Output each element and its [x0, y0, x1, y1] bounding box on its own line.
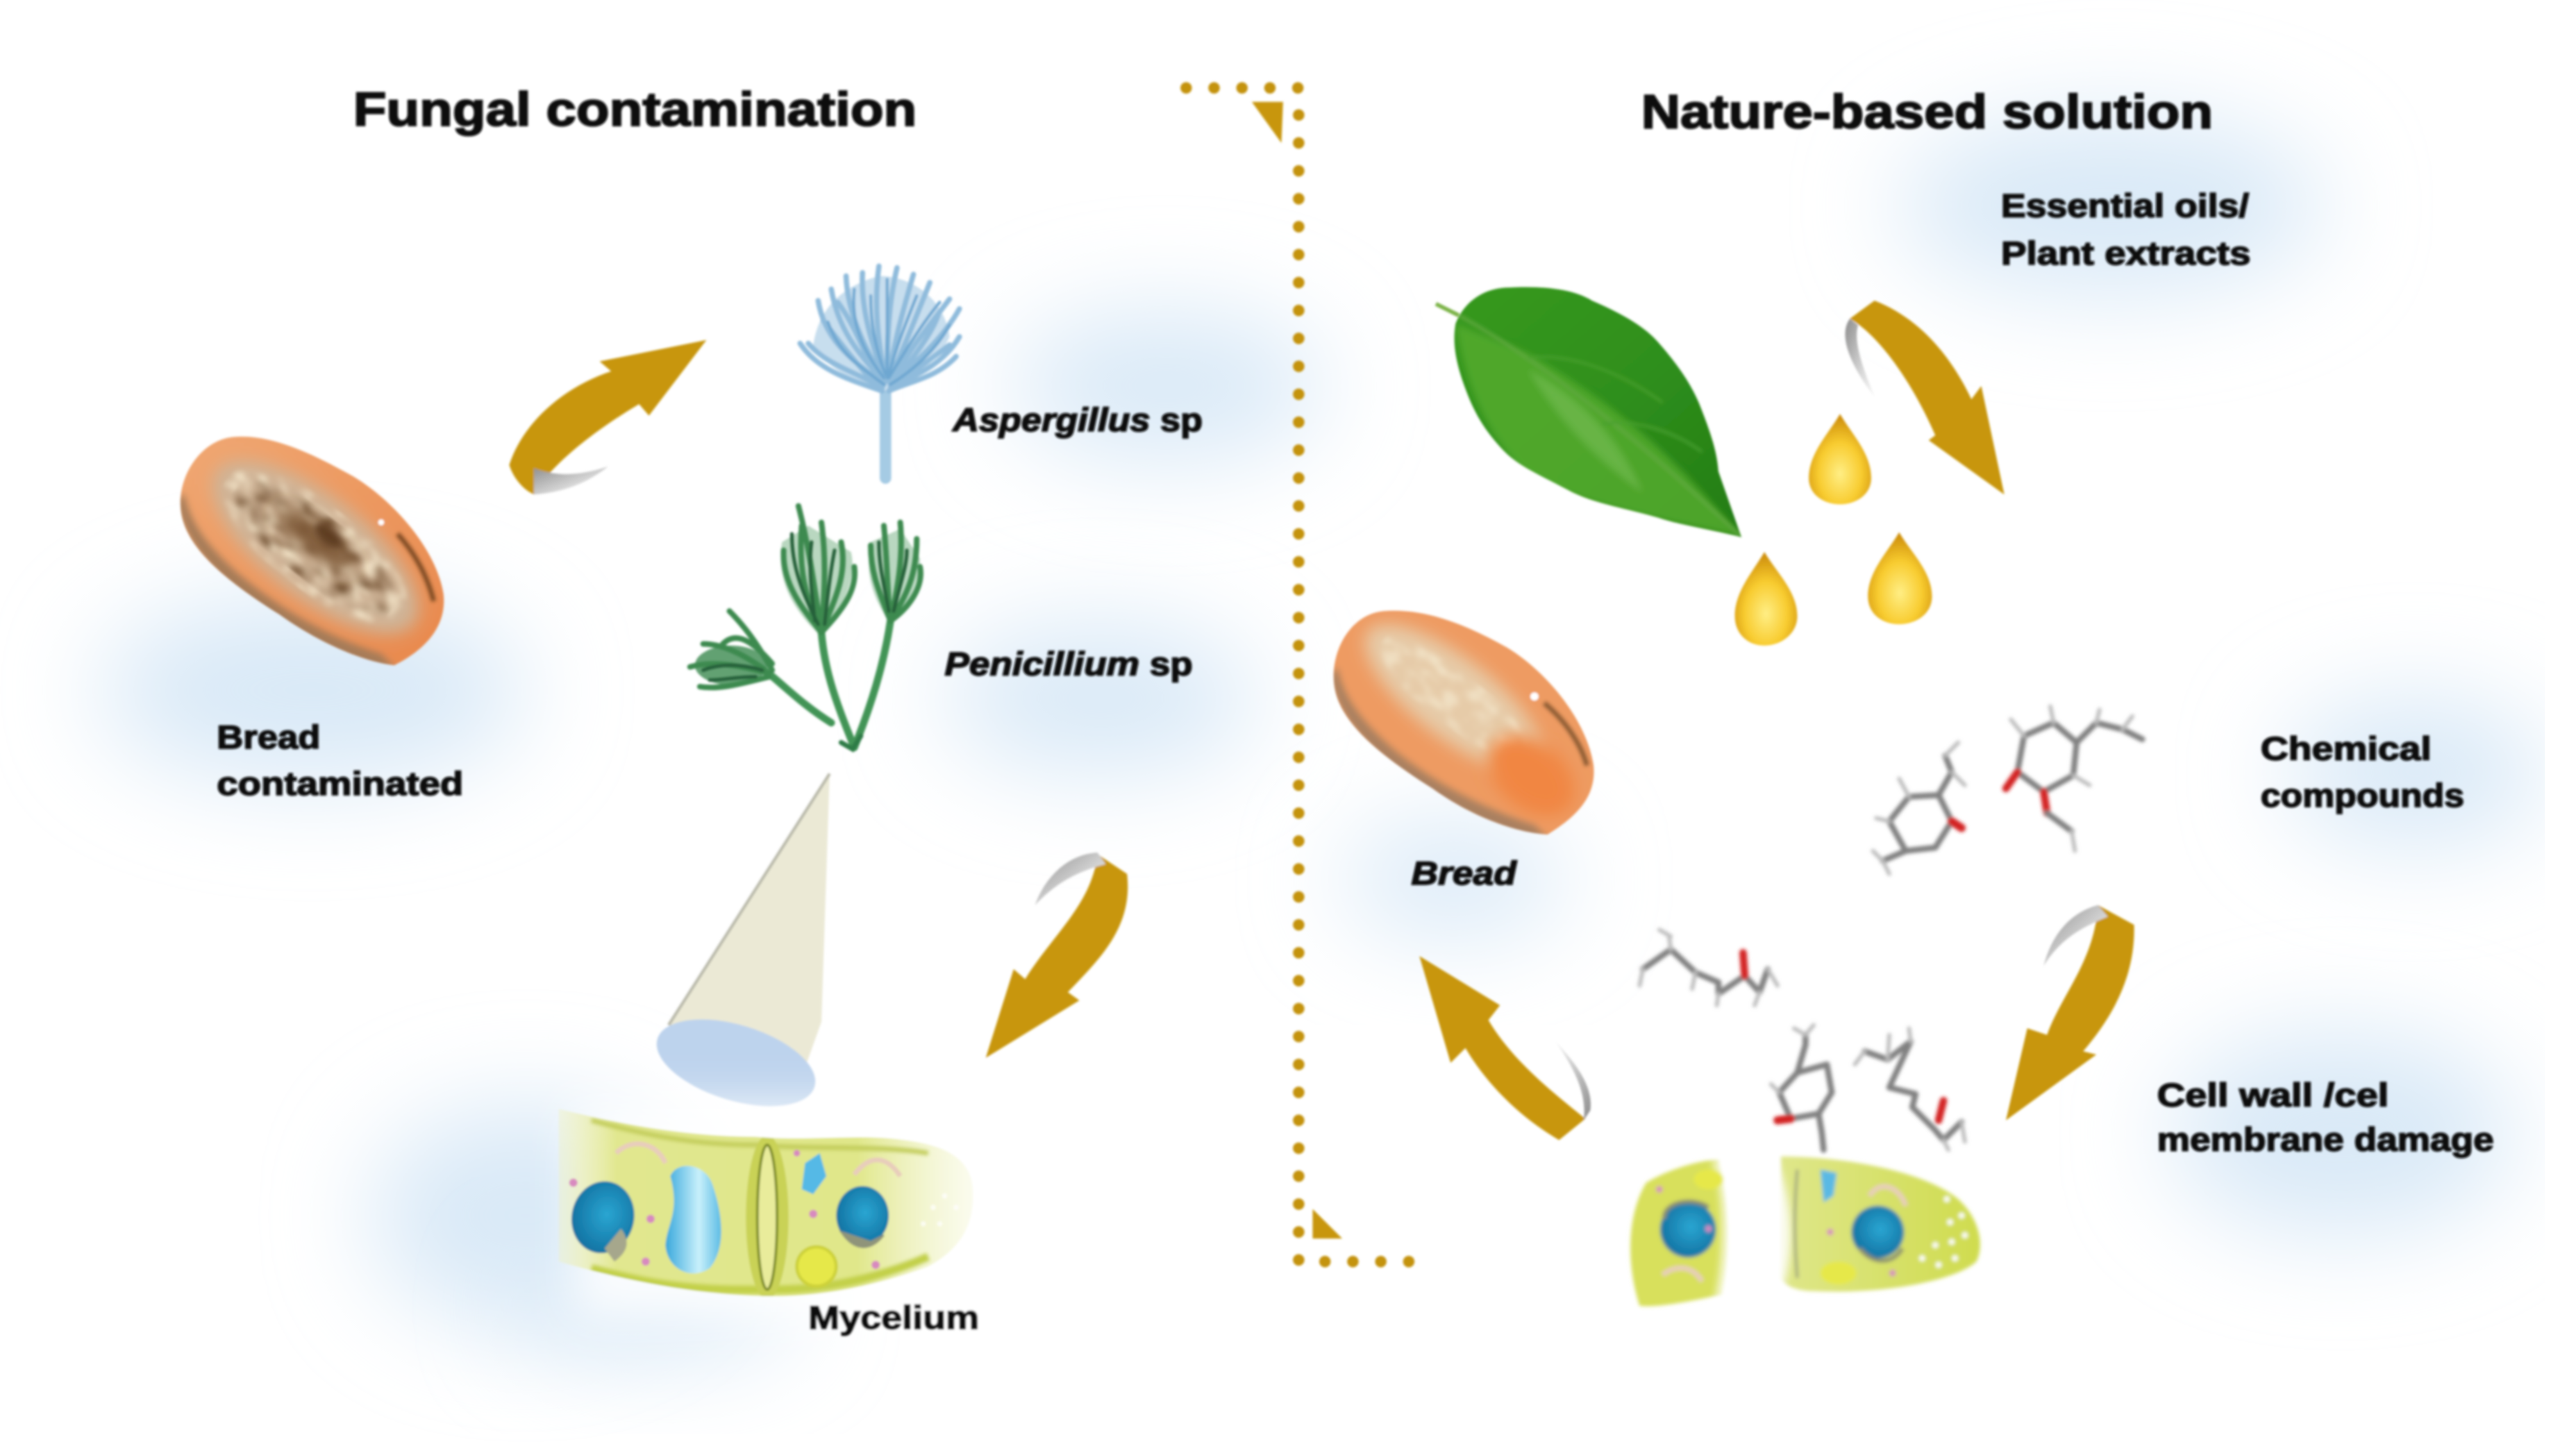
label: cell wall and membrane damage: membrane damage: [2157, 1121, 2494, 1158]
arrow: oils to compounds: [1845, 301, 2005, 494]
left fragment: [1630, 1157, 1745, 1306]
molecule: eugenol-like compound: [2006, 706, 2142, 851]
arrow: compounds to cell damage: [2006, 905, 2134, 1121]
heading: fungal contamination: Fungal contamination: [353, 83, 917, 136]
icon: oil drop: [1868, 532, 1932, 624]
label: aspergillus sp: Aspergillus sp: [952, 402, 1203, 439]
label: mycelium: Mycelium: [808, 1300, 979, 1336]
arrow: fungi to mycelium: [986, 853, 1128, 1058]
dotted divider with corner triangles: [1186, 88, 1413, 1261]
icon: oil drop: [1735, 552, 1797, 646]
label: cell wall and membrane damage: [2157, 1077, 2494, 1158]
label: cell wall and membrane damage: Cell wall /cel: [2157, 1077, 2389, 1114]
artwork: [178, 83, 2494, 1336]
damaged cell: broken hypha: [1630, 1157, 1980, 1306]
icon: penicillium conidiophore: [690, 506, 921, 749]
label: bread contaminated: Bread: [217, 719, 320, 756]
label: essential oils and plant extracts: Essential oils/: [2001, 187, 2249, 224]
molecule: thymol-like compound: [1873, 742, 1965, 874]
label: essential oils and plant extracts: Plant extracts: [2001, 235, 2251, 272]
arrow: bread to fungi: [509, 340, 706, 494]
molecule: ring compound above cell: [1771, 1025, 1832, 1150]
bread: [1331, 601, 1594, 841]
label: bread contaminated: [217, 719, 463, 803]
right fragment: [1768, 1157, 1980, 1291]
icon: green leaf: [1436, 287, 1741, 537]
molecule: chain compound above cell: [1855, 1028, 1965, 1150]
arrow: cell damage to bread: [1419, 956, 1591, 1140]
white halo behind mycelium: [575, 1104, 1019, 1318]
label: bread contaminated: contaminated: [217, 766, 463, 803]
contaminated bread: [178, 430, 445, 670]
label: chemical compounds: [2261, 730, 2464, 814]
molecule: chain compound: [1639, 930, 1778, 1005]
label: chemical compounds: Chemical: [2261, 730, 2432, 767]
zoom cone to mycelium: [646, 773, 830, 1123]
icon: aspergillus conidiophore: [800, 266, 960, 478]
label: essential oils and plant extracts: [2001, 187, 2251, 272]
label: penicillium sp: Penicillium sp: [944, 646, 1193, 682]
label: chemical compounds: compounds: [2261, 778, 2464, 814]
heading: nature-based solution: Nature-based solution: [1641, 85, 2213, 139]
icon: oil drop: [1809, 414, 1871, 504]
label: bread: Bread: [1411, 855, 1517, 892]
mycelium cell: [558, 1109, 973, 1300]
